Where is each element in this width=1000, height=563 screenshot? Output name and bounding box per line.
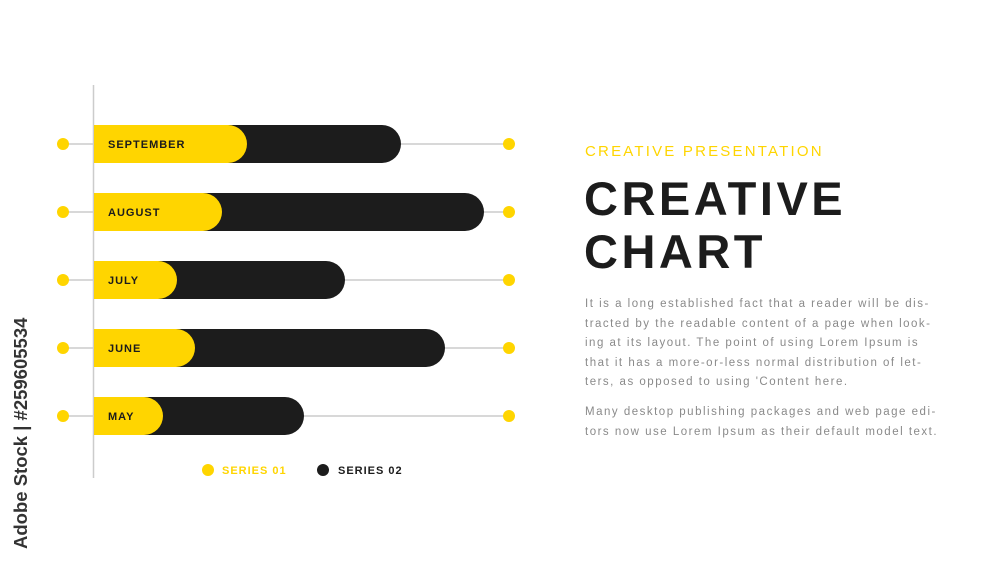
axis — [92, 85, 94, 478]
paragraph 1: that it has a more-or-less normal distribution of let- — [585, 357, 922, 369]
title: CHART — [584, 225, 766, 278]
bar: may: MAY — [108, 411, 134, 423]
legend: SERIES 01 — [222, 465, 287, 477]
paragraph 2 — [585, 406, 938, 438]
paragraph 1: ing at its layout. The point of using Lorem Ipsum is — [585, 337, 919, 349]
bar: september: SEPTEMBER — [108, 139, 185, 151]
paragraph 2: Many desktop publishing packages and web page edi- — [585, 406, 937, 418]
bar: may — [57, 397, 515, 435]
legend — [202, 464, 403, 477]
bar: july — [57, 261, 515, 299]
bar: september — [57, 125, 515, 163]
bar: august — [57, 193, 515, 231]
chart — [57, 85, 515, 478]
watermark id: Adobe Stock | #259605534 — [10, 318, 31, 549]
bar: july: JULY — [108, 275, 139, 287]
paragraph 1: It is a long established fact that a reader will be dis- — [585, 298, 930, 310]
paragraph 2: tors now use Lorem Ipsum as their default model text. — [585, 426, 938, 438]
bar: june: JUNE — [108, 343, 141, 355]
legend: SERIES 02 — [338, 465, 403, 477]
title: CREATIVE — [584, 172, 846, 225]
subtitle: CREATIVE PRESENTATION — [585, 143, 824, 160]
paragraph 1: ters, as opposed to using 'Content here. — [585, 376, 849, 388]
paragraph 1: tracted by the readable content of a page when look- — [585, 318, 932, 330]
bar: august: AUGUST — [108, 207, 160, 219]
paragraph 1 — [585, 298, 932, 388]
bar: june — [57, 329, 515, 367]
title — [584, 172, 846, 278]
